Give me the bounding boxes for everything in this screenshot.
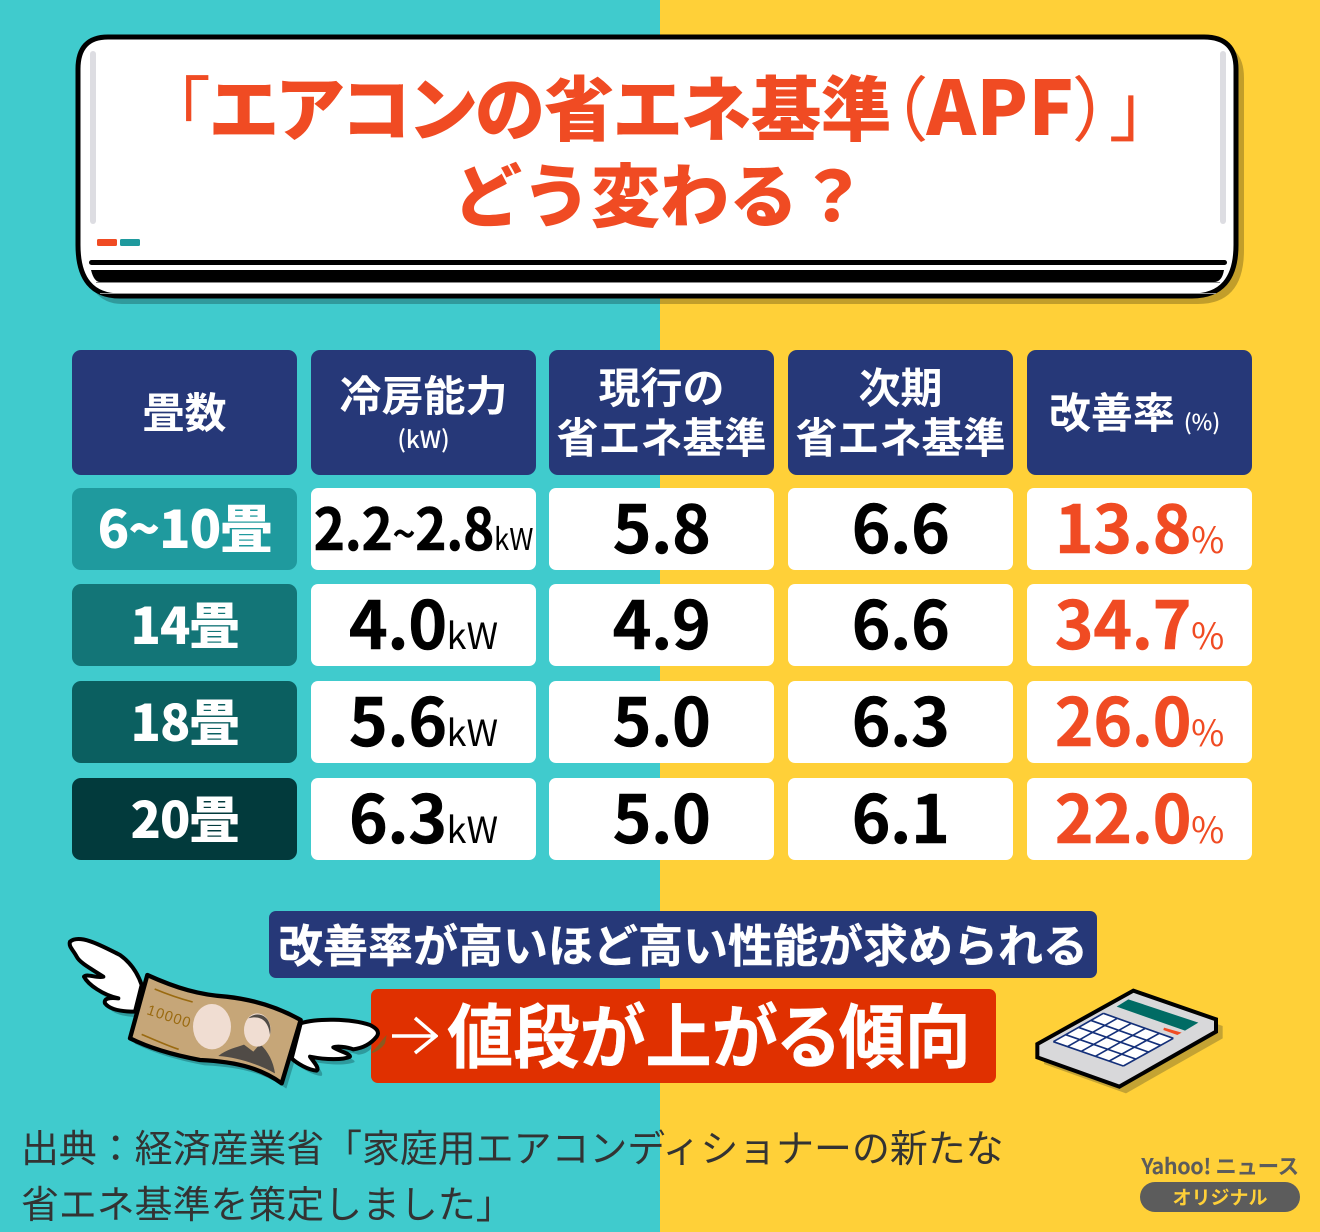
original pill — [1140, 1182, 1300, 1212]
header: cooling capacity — [311, 350, 536, 475]
cell: capacity 5.6: 5.6kW — [349, 670, 498, 766]
cell: capacity 6.3 — [311, 778, 536, 860]
cell: rate 22.0: 22.0% — [1055, 767, 1224, 863]
original pill: オリジナル — [1172, 1182, 1268, 1210]
cell: capacity 4.0: 4.0kW — [349, 573, 498, 669]
callout: higher rate needs higher performance: 改善率が高いほど高い性能が求められる — [278, 910, 1088, 975]
source note: 出典：経済産業省「家庭用エアコンディショナーの新たな — [21, 1118, 1004, 1173]
cell: next 6.6: 6.6 — [852, 573, 949, 669]
row label: 14 mats: 14畳 — [131, 587, 238, 659]
header: tatami count — [72, 350, 297, 475]
header: cooling capacity: 冷房能力 — [339, 362, 508, 424]
title line 1: 「エアコンの省エネ基準（APF）」 — [174, 48, 1146, 157]
cell: next 6.6 — [788, 584, 1013, 666]
cell: rate 13.8 — [1027, 488, 1252, 570]
cell: current 5.8: 5.8 — [613, 477, 710, 573]
Yahoo news original logo — [1140, 1150, 1300, 1212]
cell: capacity 4.0 — [311, 584, 536, 666]
cell: next 6.1: 6.1 — [852, 767, 949, 863]
cell: capacity 2.2-2.8: 2.2~2.8kW — [314, 483, 533, 567]
cell: current 4.9 — [549, 584, 774, 666]
cell: next 6.3: 6.3 — [852, 670, 949, 766]
arrow — [392, 1016, 438, 1054]
cell: rate 13.8: 13.8% — [1055, 477, 1224, 573]
cell: rate 34.7 — [1027, 584, 1252, 666]
header: current standard: 現行の — [598, 354, 724, 416]
cell: current 5.0 — [549, 778, 774, 860]
air conditioner title panel — [76, 34, 1244, 304]
cell: current 4.9: 4.9 — [613, 573, 710, 669]
cell: current 5.0 — [549, 681, 774, 763]
header: current standard — [549, 350, 774, 475]
header: improvement rate — [1027, 350, 1252, 475]
header: next standard: 次期 — [858, 354, 942, 416]
row label: 20 mats — [72, 778, 297, 860]
cell: next 6.3 — [788, 681, 1013, 763]
source note — [21, 1118, 1004, 1229]
header: tatami count: 畳数 — [142, 380, 226, 440]
cell: next 6.6: 6.6 — [852, 477, 949, 573]
row label: 14 mats — [72, 584, 297, 666]
cell: capacity 6.3: 6.3kW — [349, 767, 498, 863]
cell: current 5.0: 5.0 — [613, 670, 710, 766]
cell: rate 26.0 — [1027, 681, 1252, 763]
header: next standard: 省エネ基準 — [795, 404, 1006, 466]
title line 2: どう変わる？ — [453, 140, 867, 240]
cell: capacity 5.6 — [311, 681, 536, 763]
cell: current 5.8 — [549, 488, 774, 570]
title — [174, 48, 1146, 240]
cell: next 6.1 — [788, 778, 1013, 860]
header: cooling capacity: (kW) — [397, 420, 450, 454]
row label: 6-10 mats: 6~10畳 — [98, 488, 271, 563]
icon: flying banknote — [68, 937, 387, 1088]
comparison table — [72, 350, 1252, 863]
cell: rate 22.0 — [1027, 778, 1252, 860]
cell: current 5.0: 5.0 — [613, 767, 710, 863]
row label: 20 mats: 20畳 — [131, 781, 238, 853]
row label: 18 mats: 18畳 — [131, 684, 238, 756]
cell: rate 34.7: 34.7% — [1055, 573, 1224, 669]
yellow right half background — [660, 0, 1320, 1232]
header: next standard — [788, 350, 1013, 475]
row label: 18 mats — [72, 681, 297, 763]
cell: rate 26.0: 26.0% — [1055, 670, 1224, 766]
callout: price tends to rise — [371, 989, 996, 1083]
icon: flying banknote: 10000 — [145, 1003, 193, 1032]
cell: next 6.6 — [788, 488, 1013, 570]
icon: calculator — [1035, 988, 1223, 1094]
logo text: Yahoo! ニュース — [1141, 1150, 1299, 1181]
source note: 省エネ基準を策定しました」 — [21, 1174, 514, 1229]
header: current standard: 省エネ基準 — [556, 404, 766, 466]
header: improvement rate: 改善率 (%) — [1049, 380, 1220, 440]
price text: 値段が上がる傾向 — [447, 982, 971, 1083]
